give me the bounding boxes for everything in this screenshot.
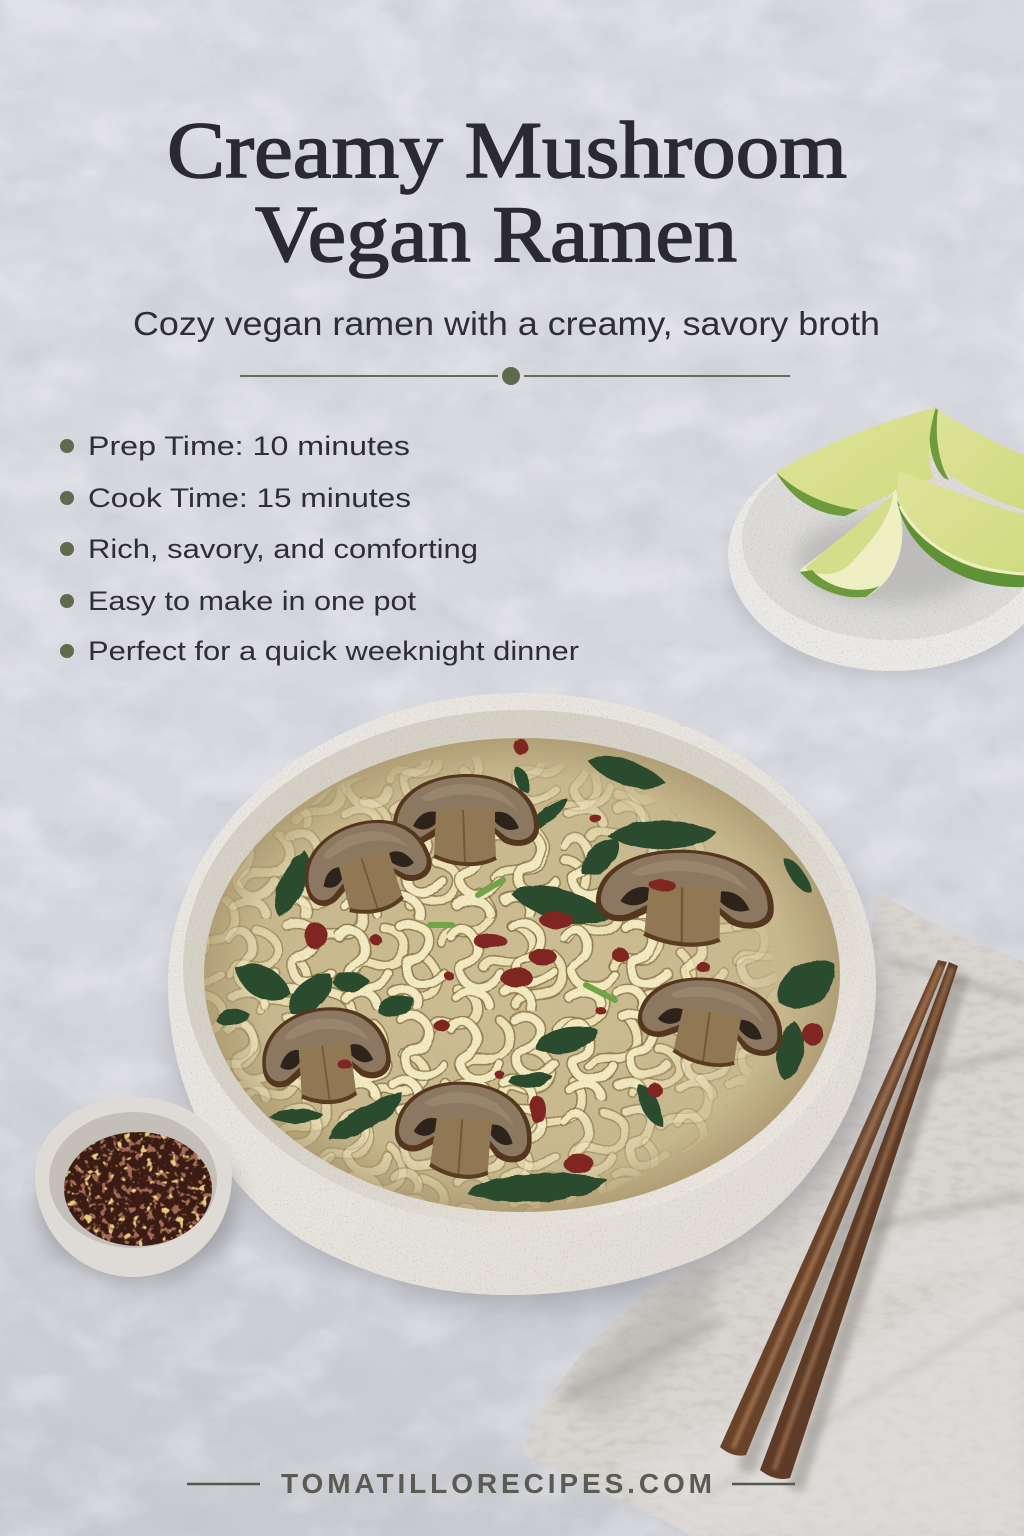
bullet: flavor: Rich, savory, and comforting	[88, 534, 478, 564]
subtitle: Cozy vegan ramen with a creamy, savory broth	[133, 305, 880, 342]
dish body	[35, 1097, 232, 1277]
title: Vegan Ramen	[255, 191, 737, 279]
napkin	[500, 880, 1024, 1536]
lime plate	[728, 407, 1024, 675]
ramen bowl	[168, 693, 880, 1302]
footer website: TOMATILLORECIPES.COM	[281, 1468, 712, 1499]
bowl speckle	[168, 693, 876, 1295]
bowl inner wall	[183, 710, 861, 1226]
title: Creamy Mushroom	[167, 107, 847, 195]
chili flakes	[60, 1130, 216, 1246]
bullet: prep time: Prep Time: 10 minutes	[88, 431, 410, 461]
lime wedge: front large	[897, 472, 1024, 587]
bullet: cook time: Cook Time: 15 minutes	[88, 483, 411, 513]
chopstick: front	[720, 960, 947, 1456]
spinach leaves	[216, 744, 844, 1202]
lime wedge: back left	[776, 407, 936, 516]
green onions	[430, 880, 615, 1000]
lime wedge: front small	[800, 489, 902, 598]
mushroom slices	[257, 774, 790, 1183]
chopsticks	[720, 960, 962, 1490]
bullet: one pot: Easy to make in one pot	[88, 586, 417, 616]
plate	[728, 439, 1024, 671]
feature list	[60, 431, 579, 666]
title	[167, 107, 847, 279]
bullet: weeknight: Perfect for a quick weeknight dinner	[88, 636, 579, 666]
chili flake dish	[35, 1097, 238, 1283]
chili flakes	[305, 739, 824, 1174]
divider	[240, 367, 790, 385]
lime wedge: back right	[928, 407, 1024, 510]
noodles	[204, 758, 798, 1212]
chopstick: rear	[760, 962, 958, 1479]
broth	[204, 738, 840, 1212]
bowl body	[168, 693, 876, 1295]
